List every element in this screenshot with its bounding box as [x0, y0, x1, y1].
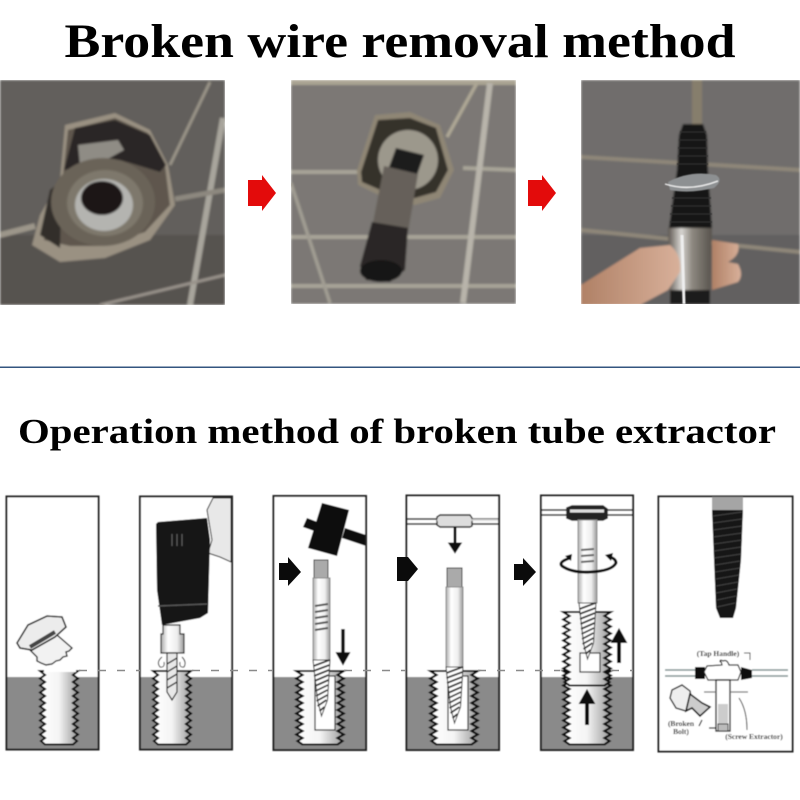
extractor closeup: [712, 497, 743, 618]
metal chips: [158, 657, 185, 667]
hand: [207, 498, 231, 562]
label: tap handle: (Tap Handle): [697, 649, 740, 658]
divider: [0, 366, 800, 368]
label: broken bolt: (Broken: [668, 719, 694, 728]
arrow: photo 1 to 2: [248, 175, 276, 211]
subtitle: Operation method of broken tube extractor: [18, 412, 776, 451]
drill chuck: [161, 625, 184, 653]
step arrow 4 to 5: [514, 558, 536, 586]
arrow down: [450, 527, 460, 551]
arrow up right: [614, 632, 624, 663]
step arrow 3 to 4: [397, 557, 418, 581]
broken bolt icon: [670, 685, 710, 716]
extractor: [578, 520, 597, 659]
photo: wire wound on extractor held in hand: [581, 80, 800, 305]
arrow: photo 2 to 3: [528, 175, 556, 211]
hammer: [303, 503, 366, 556]
tap handle: [407, 515, 499, 527]
photo: hole in tiled wall with broken pipe: [0, 80, 225, 305]
drill body: [156, 518, 210, 625]
rotation arrow: [561, 553, 616, 572]
label: screw extractor: (Screw Extractor): [725, 732, 783, 741]
step 3 panel: hammer in extractor: [274, 496, 366, 750]
extractor thread and wire: [665, 132, 720, 304]
step 1 panel: broken bolt: [6, 496, 98, 750]
arrow down: [338, 629, 348, 662]
arrow up lower: [582, 693, 592, 725]
dashed surface line: [79, 670, 633, 672]
step arrow 2 to 3: [279, 557, 301, 586]
label: broken bolt: Bolt): [673, 727, 689, 736]
tap handle diagram: [665, 660, 788, 731]
step 2 panel: drilling: [140, 496, 232, 750]
extractor: [446, 568, 463, 723]
title: Broken wire removal method: [64, 15, 736, 68]
step 5 panel: turning out the broken bolt: [541, 496, 633, 750]
photo: extractor bit inserted in pipe: [291, 80, 516, 304]
drill bit: [167, 653, 177, 700]
broken bolt: [17, 616, 72, 665]
tap handle: [541, 506, 633, 520]
extractor: [313, 560, 330, 716]
step 4 panel: handle and extractor: [406, 496, 499, 750]
step 6 panel: extractor and labelled diagram: [658, 496, 792, 752]
